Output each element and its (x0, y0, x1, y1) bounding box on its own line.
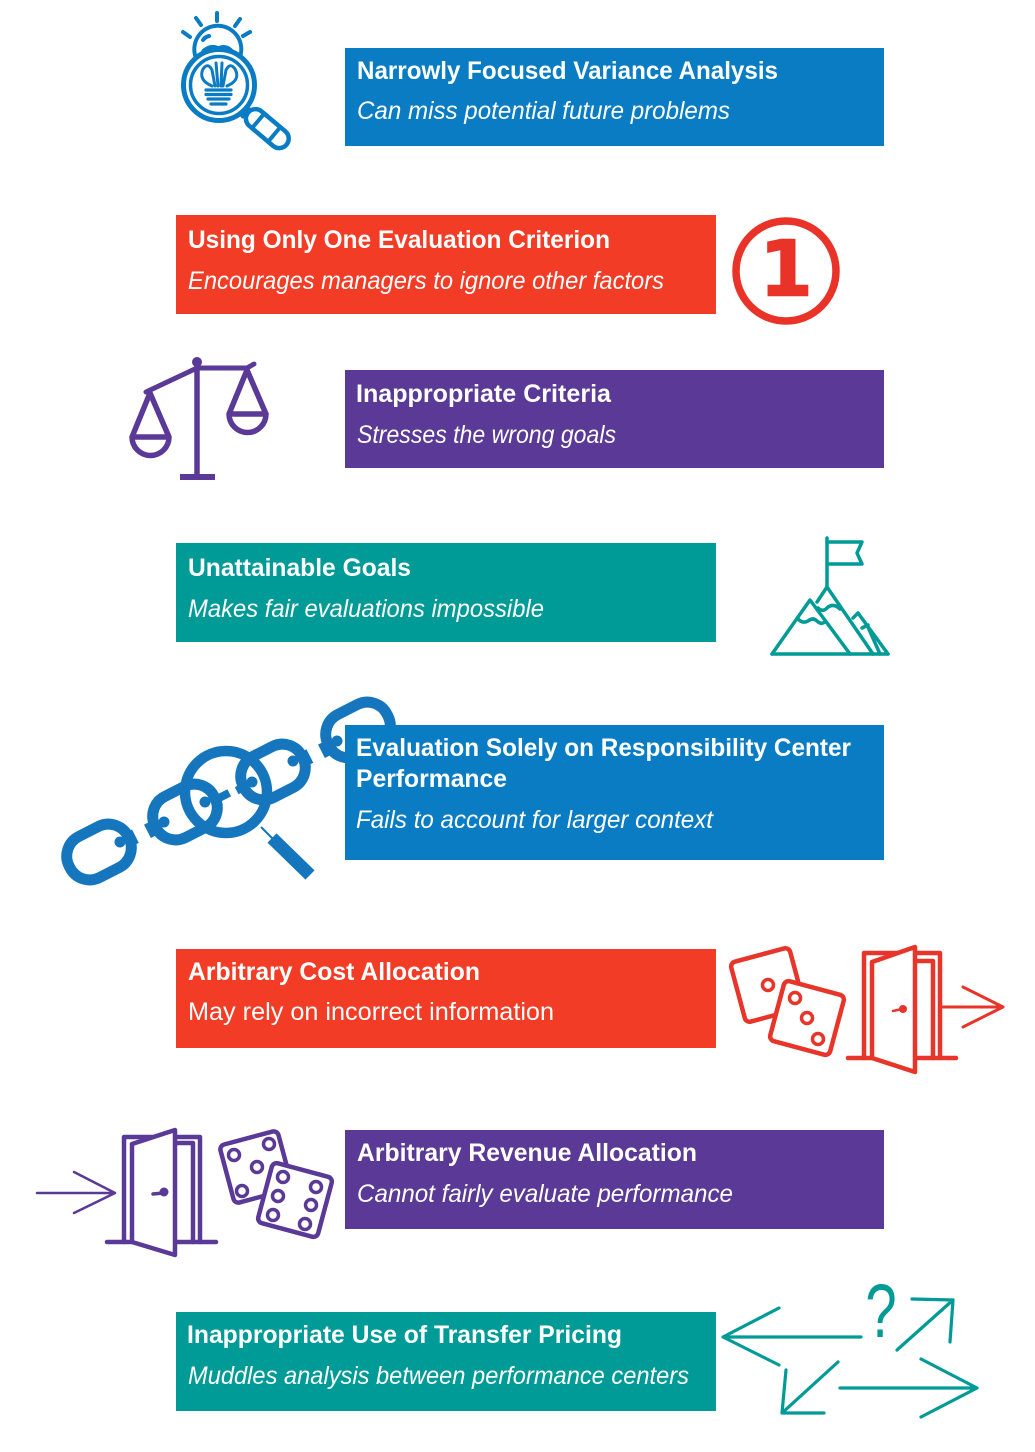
icon: chain links under magnifier (59, 695, 398, 887)
description: Can miss potential future problems (357, 97, 730, 125)
panel: unattainable goals (176, 543, 716, 642)
heading line two: Performance (356, 765, 507, 793)
icon: door with entry arrow (37, 1130, 216, 1255)
heading: Inappropriate Use of Transfer Pricing (187, 1321, 622, 1349)
description: Fails to account for larger context (356, 806, 714, 834)
question mark: ? (865, 1269, 897, 1354)
icon: door with exit arrow (848, 947, 1003, 1072)
panel: arbitrary cost allocation (176, 949, 716, 1048)
description: Encourages managers to ignore other factors (188, 267, 664, 295)
heading: Narrowly Focused Variance Analysis (357, 57, 778, 85)
panel: inappropriate criteria (345, 370, 884, 468)
icon: purple dice (219, 1130, 333, 1238)
heading: Inappropriate Criteria (356, 380, 612, 408)
heading: Using Only One Evaluation Criterion (188, 226, 610, 254)
panel: inappropriate use of transfer pricing (176, 1312, 716, 1411)
icon: four arrows with question mark (723, 1269, 977, 1417)
icon: balance scales (132, 357, 266, 477)
heading: Unattainable Goals (188, 554, 411, 582)
icon: light bulb under magnifying glass (183, 13, 293, 152)
icon: mountain with flag (772, 538, 888, 654)
description: Muddles analysis between performance centers (188, 1362, 689, 1390)
heading: Arbitrary Cost Allocation (188, 958, 480, 986)
icon: number one in circle: 1 (759, 226, 813, 314)
description: Cannot fairly evaluate performance (357, 1180, 733, 1208)
description: Makes fair evaluations impossible (188, 595, 544, 623)
description: May rely on incorrect information (188, 998, 554, 1026)
panel: narrowly focused variance analysis (345, 48, 884, 146)
icon: number one in circle (736, 221, 836, 321)
panel: evaluation solely on responsibility center performance (345, 725, 884, 860)
heading: Evaluation Solely on Responsibility Center (356, 734, 851, 762)
icon: red dice (730, 947, 845, 1056)
panel: arbitrary revenue allocation (345, 1130, 884, 1229)
description: Stresses the wrong goals (357, 421, 616, 449)
heading: Arbitrary Revenue Allocation (357, 1139, 697, 1167)
panel: using only one evaluation criterion (176, 215, 716, 314)
